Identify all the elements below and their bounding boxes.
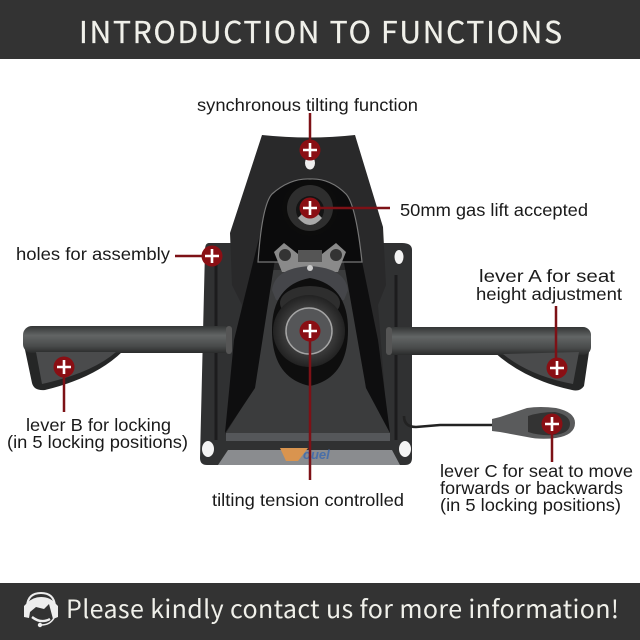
- right black strip: [340, 222, 390, 433]
- inner lower panel: [226, 270, 390, 433]
- leader lines: [64, 113, 556, 480]
- label: lever A: height adjustment: [476, 284, 622, 304]
- logo: [280, 447, 330, 462]
- label: synchronous tilting: synchronous tilting function: [197, 95, 418, 115]
- footer bar: [0, 583, 640, 640]
- main body shell: [225, 135, 388, 440]
- label: lever C: (in 5 locking positions): [440, 495, 621, 515]
- markers: [54, 140, 568, 434]
- footer text: Please kindly contact us for more information!: [66, 590, 619, 626]
- label: lever A: lever A for seat: [479, 266, 615, 286]
- marker: lever B: [54, 356, 74, 378]
- label: lever B: [7, 415, 188, 452]
- arm collars: [226, 326, 392, 355]
- tension knob: [273, 286, 345, 367]
- label: gas lift: 50mm gas lift accepted: [400, 200, 588, 220]
- label: lever C: lever C for seat to move: [440, 461, 633, 481]
- right arm: [386, 327, 591, 390]
- label: lever C: [440, 461, 633, 515]
- icon: headset: [24, 593, 58, 627]
- label: lever B: lever B for locking: [26, 415, 171, 435]
- label: tension: tilting tension controlled: [212, 490, 404, 510]
- label: lever B: (in 5 locking positions): [7, 432, 188, 452]
- bracket: [274, 243, 346, 272]
- label: lever C: forwards or backwards: [440, 478, 623, 498]
- gas lift socket: [282, 180, 338, 236]
- knob housing: [272, 266, 348, 300]
- marker: synchronous tilting: [300, 140, 320, 160]
- header bar: [0, 0, 640, 59]
- label: holes: holes for assembly: [16, 244, 170, 264]
- title: INTRODUCTION TO FUNCTIONS: [79, 8, 562, 52]
- centre cut-out: [272, 278, 348, 386]
- lever C: [404, 407, 575, 439]
- left black strip: [225, 222, 278, 433]
- logo: ouel: [303, 447, 330, 462]
- marker: holes: [202, 246, 222, 266]
- marker: tension: [300, 320, 320, 342]
- marker: lever A: [546, 358, 568, 378]
- back plate: [200, 243, 412, 465]
- mounting holes: [202, 250, 411, 457]
- left arm: [23, 326, 232, 390]
- top housing arch: [258, 179, 362, 262]
- chair mechanism: [23, 135, 591, 465]
- label: lever A: [476, 266, 622, 304]
- trapezoid ridge: [226, 433, 390, 441]
- marker: gas lift: [300, 198, 320, 218]
- slot: [305, 156, 315, 170]
- marker: lever C: [542, 414, 562, 434]
